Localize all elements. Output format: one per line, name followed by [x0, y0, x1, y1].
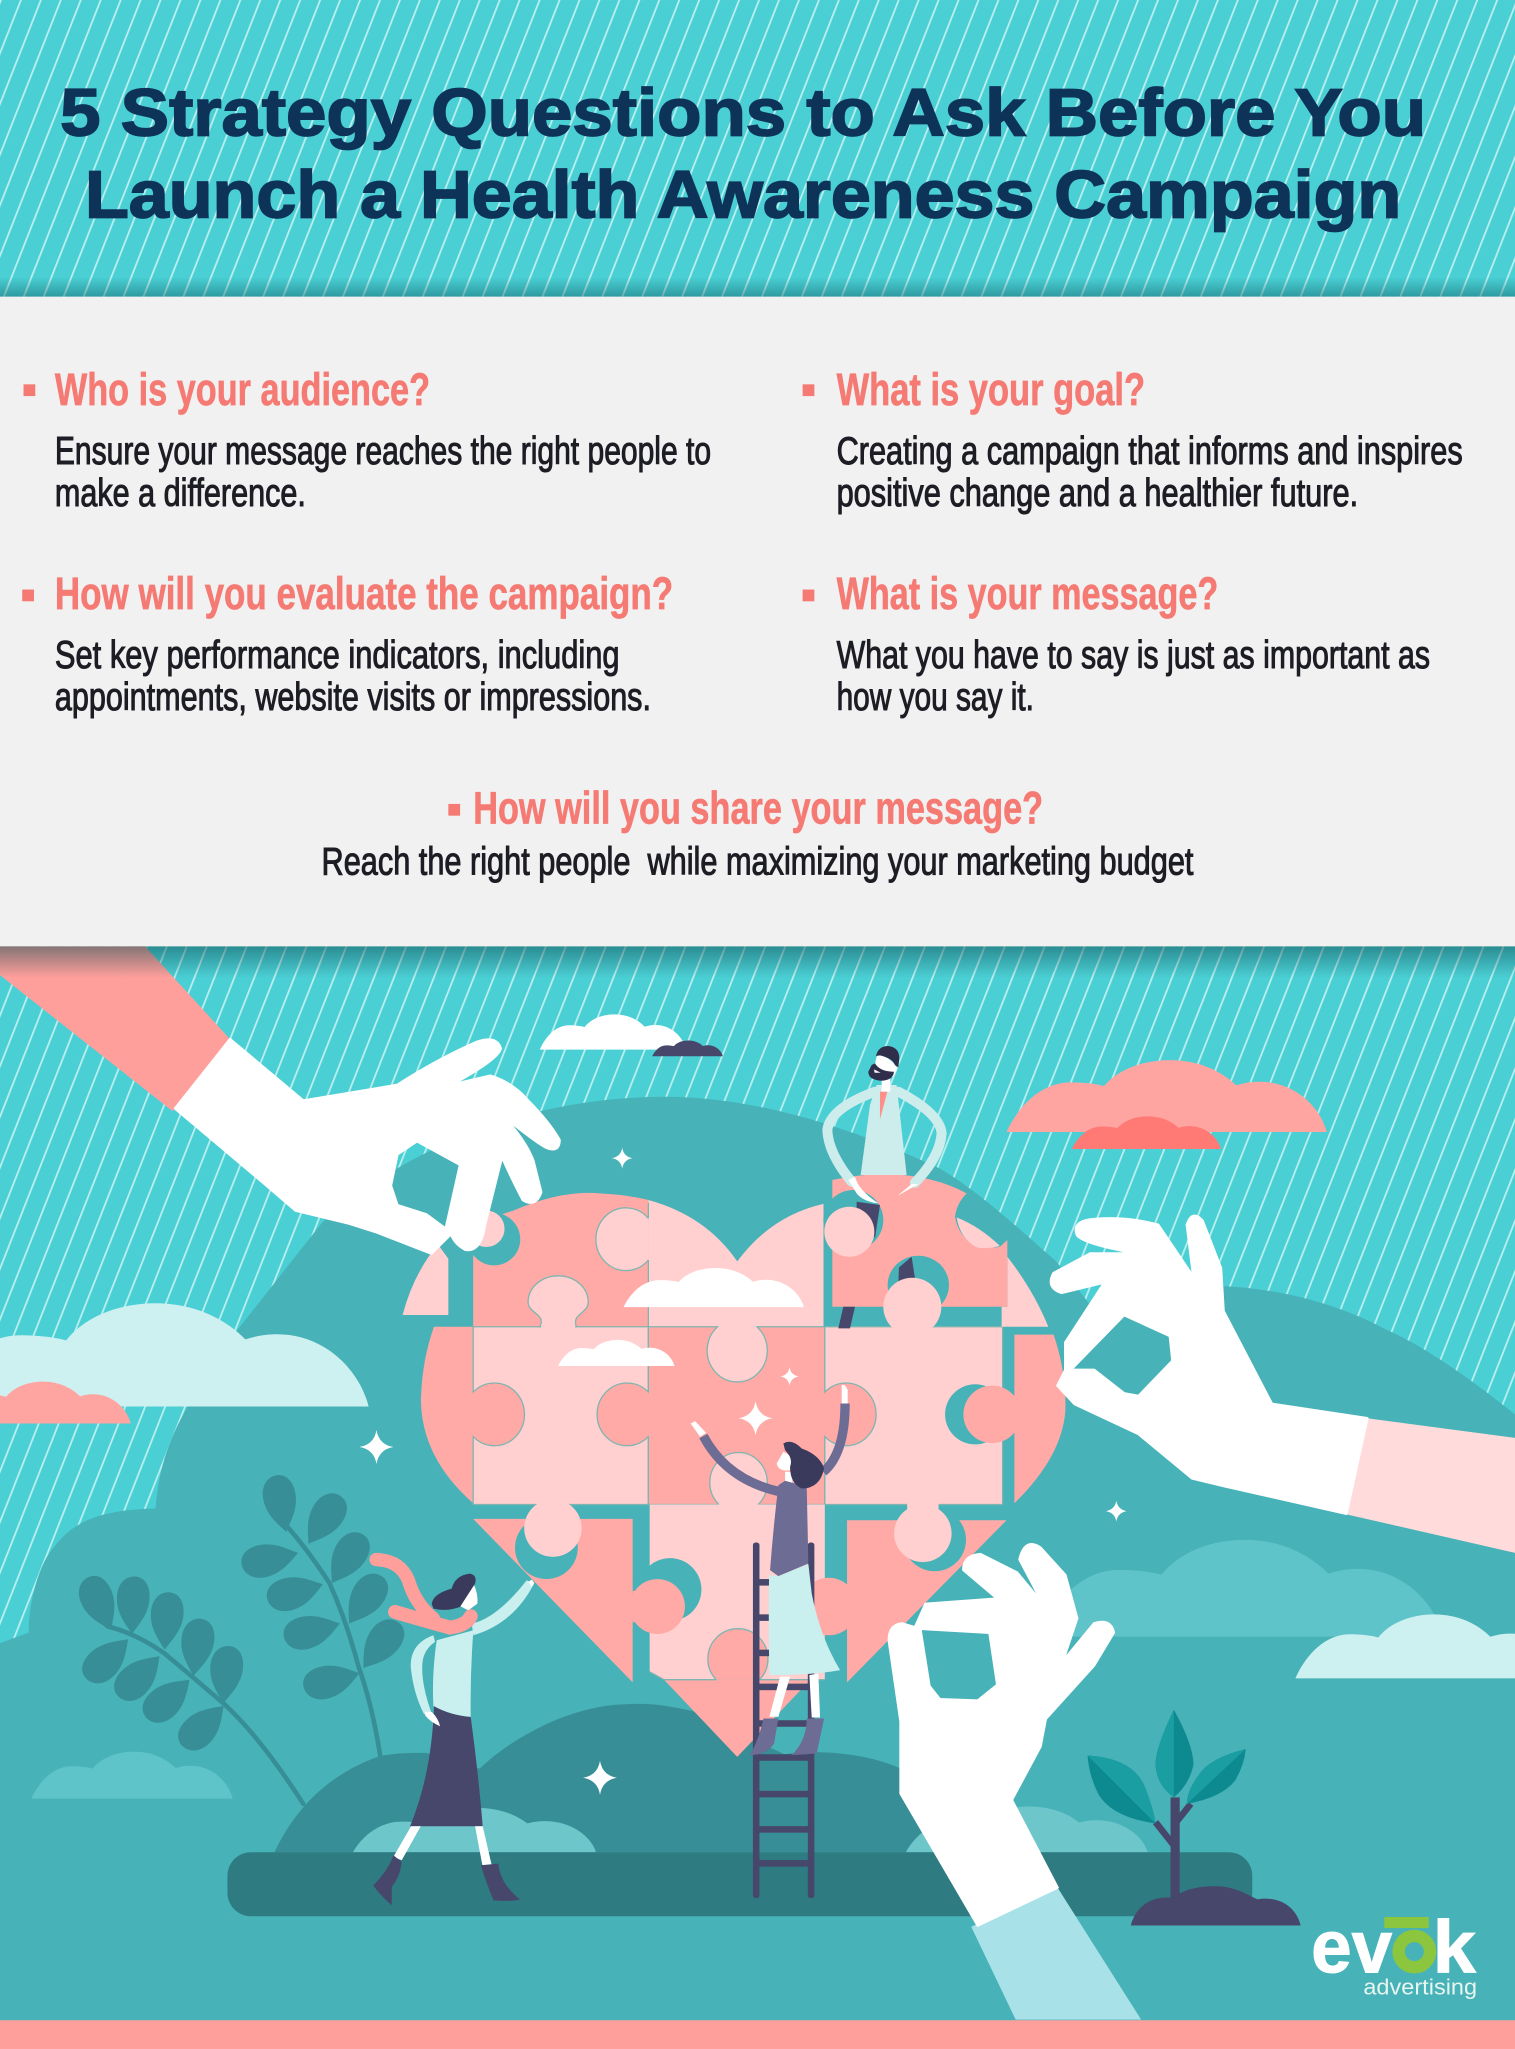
cloud: navy small: [652, 1041, 723, 1056]
question: audience: Who is your audience?: [55, 364, 430, 415]
question: audience: make a difference.: [55, 472, 306, 515]
hand: right: [1051, 1216, 1367, 1514]
ground bar: [227, 1852, 1252, 1916]
question: goal: What is your goal?: [837, 364, 1145, 415]
question: goal: [803, 364, 1463, 515]
piece: top row center: [648, 1200, 824, 1327]
piece: row two light left: [473, 1327, 648, 1505]
plant: left branch: [73, 1571, 303, 1804]
knob: dark right: [963, 1386, 1021, 1443]
piece: row three right triangle: [847, 1520, 1007, 1682]
knob: top center-left: [528, 1276, 588, 1327]
knob: finger grip: [468, 1210, 505, 1247]
sleeve: bottom: [971, 1888, 1141, 2020]
cloud: white on heart large: [624, 1268, 804, 1307]
plant: sapling: [1088, 1710, 1301, 1925]
leg through notch: [898, 1257, 915, 1283]
light blob right: [957, 1217, 1000, 1248]
cloud: coral small: [1072, 1116, 1221, 1149]
cloud: teal near hand: [906, 1807, 1148, 1852]
shadow under panel: [0, 946, 1515, 978]
light knob bottom: [883, 1278, 941, 1336]
cloud: large pale left: [0, 1303, 369, 1407]
question: audience: Ensure your message reaches the right people to: [55, 430, 711, 473]
question: share: Reach the right people while maximizing your marketing budget: [322, 841, 1194, 884]
cloud: salmon large: [1007, 1060, 1327, 1132]
panel: questions: [0, 297, 1515, 946]
cloud: salmon left: [0, 1382, 131, 1424]
illustration sky: [0, 946, 1515, 1731]
upper leg: [857, 1202, 880, 1238]
piece: row two far left: [421, 1327, 473, 1503]
figure: woman walking: [373, 1560, 534, 1905]
plant: right branch: [239, 1473, 411, 1757]
title: [60, 76, 1426, 233]
piece: row two dark center: [648, 1327, 825, 1505]
notch bottom: [888, 1256, 949, 1314]
sleeve: top left: [0, 946, 230, 1111]
question: evaluate: How will you evaluate the campaign?: [55, 568, 673, 619]
notch: teal row three left: [515, 1516, 578, 1579]
question: message: how you say it.: [837, 676, 1034, 719]
ladder: [753, 1542, 814, 1898]
question: message: What is your message?: [837, 568, 1218, 619]
title: Launch a Health Awareness Campaign: [85, 159, 1401, 233]
gap: teal right of light cell: [1004, 1328, 1014, 1506]
hills: [0, 1097, 1515, 2021]
knob: dark right of center: [800, 1578, 857, 1635]
knob: dark row three: [630, 1579, 685, 1634]
hand: bottom: [889, 1544, 1114, 1925]
knob: dark left: [473, 1383, 524, 1446]
seam: top vertical: [647, 1203, 649, 1327]
piece: top row left: [473, 1193, 648, 1327]
notch: teal crescent: [639, 1558, 701, 1621]
notch left: [823, 1190, 883, 1250]
logo: evok advertising: k: [1433, 1906, 1476, 1989]
knob: light lower notch of center: [710, 1452, 767, 1505]
logo: evok advertising: ev: [1311, 1906, 1393, 1989]
notch: teal left: [468, 1213, 520, 1265]
question: evaluate: Set key performance indicators, including: [55, 634, 620, 677]
notch: teal right: [945, 1384, 1005, 1444]
question: evaluate: appointments, website visits or impressions.: [55, 676, 651, 719]
piece: bottom tip: [664, 1680, 810, 1757]
cloud: pale right: [1295, 1614, 1515, 1678]
logo: evok advertising: advertising: [1363, 1975, 1477, 2000]
piece: row three center: [650, 1505, 825, 1680]
knob: dark into right light: [825, 1383, 876, 1446]
light knob left: [824, 1207, 874, 1257]
knob: dark bottom: [708, 1629, 768, 1680]
piece: right dark: [1014, 1335, 1065, 1503]
logo: green o with macron: [1384, 1917, 1430, 1967]
knob: light row three right: [894, 1505, 952, 1562]
question: share: How will you share your message?: [473, 783, 1043, 834]
displaced top right piece: [823, 1174, 1048, 1336]
piece: row three left triangle: [473, 1519, 633, 1682]
question: goal: positive change and a healthier future.: [837, 472, 1358, 515]
knob: light row three left: [524, 1499, 582, 1557]
title: 5 Strategy Questions to Ask Before You: [60, 76, 1426, 150]
question: share: [322, 783, 1194, 884]
piece: top left fragment: [403, 1244, 448, 1315]
question: message: [803, 568, 1430, 719]
bottom band: [0, 2020, 1515, 2049]
heart puzzle: [403, 1174, 1065, 1757]
lower leg: [838, 1307, 855, 1328]
cloud: teal right: [1038, 1540, 1443, 1637]
notch: teal row three right: [903, 1508, 966, 1571]
cloud: white on heart small: [558, 1340, 674, 1366]
dark hill: [275, 1704, 941, 1852]
cloud: white top: [540, 1014, 686, 1050]
piece: row two light right: [825, 1327, 1003, 1505]
knob: top left right: [596, 1208, 648, 1271]
knob: light from top: [707, 1327, 767, 1382]
logo: evok advertising: [1311, 1906, 1477, 2000]
header band: [0, 0, 1515, 297]
question: audience: [24, 364, 711, 515]
seam: row three bottom: [650, 1672, 825, 1680]
dark piece: [832, 1174, 1007, 1307]
sparkles: [359, 1148, 1127, 1795]
right light fragment: [1002, 1257, 1048, 1327]
hand: top left: [175, 1039, 559, 1254]
knob: dark into left light: [597, 1383, 648, 1446]
sleeve: right: [1344, 1418, 1515, 1553]
figure: man on puzzle: [827, 1046, 942, 1203]
question: evaluate: [22, 568, 673, 719]
cloud: teal center: [353, 1808, 596, 1852]
cloud: teal bottom left: [31, 1752, 233, 1799]
figure: woman on ladder: [691, 1385, 848, 1755]
